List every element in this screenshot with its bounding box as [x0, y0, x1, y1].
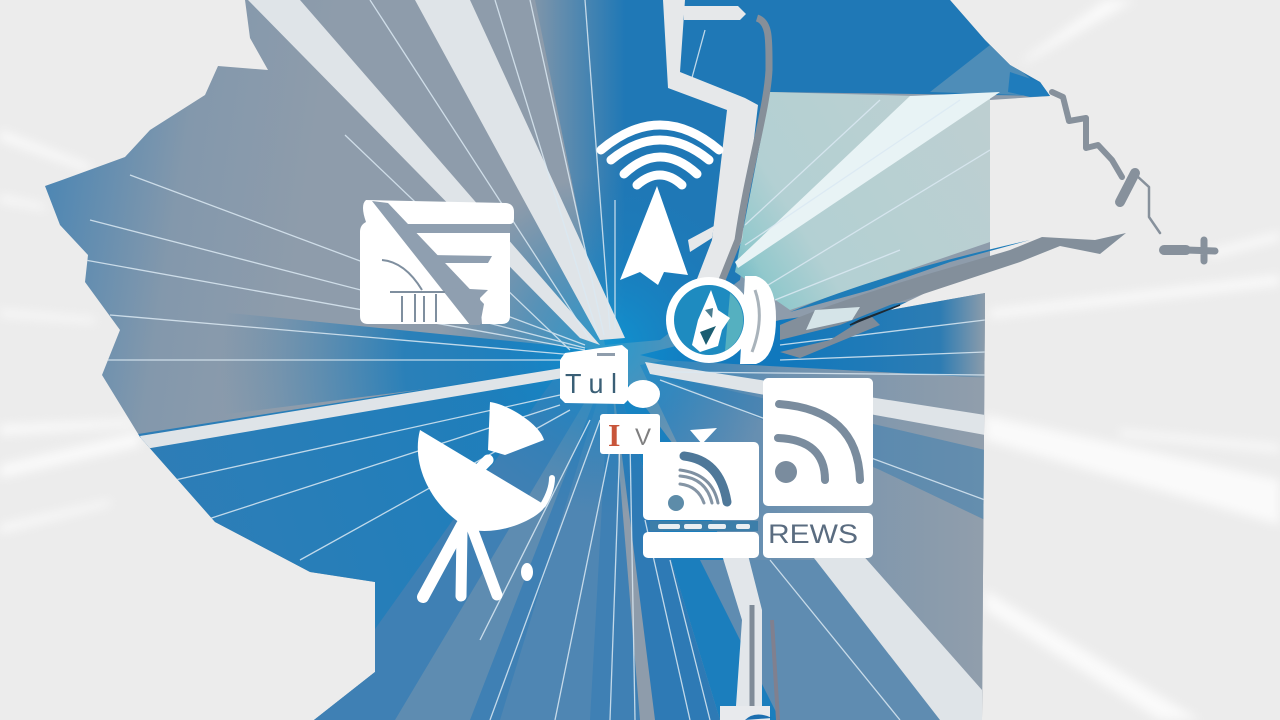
white dot — [626, 380, 660, 408]
wifi arcs — [601, 125, 719, 185]
coast blue tip — [1008, 72, 1050, 97]
map sector: top blue — [535, 0, 1060, 345]
small arrow tip — [690, 428, 717, 444]
map sector: right gray and blue — [640, 300, 990, 720]
center blue glow — [454, 194, 758, 500]
coastline lower gray band — [780, 233, 1126, 358]
map sector: bottom gray blue — [310, 360, 640, 720]
icon: TV label: I — [608, 417, 620, 453]
icon: satellite dish — [418, 402, 552, 597]
map silhouette with radial rays — [45, 0, 1050, 720]
coastline right islands — [1052, 92, 1215, 261]
icon: RSS news card: REWS — [768, 519, 858, 549]
map base: gray — [45, 0, 1050, 720]
icon: RSS news card — [763, 378, 873, 558]
icon: clapperboard news panel — [360, 200, 514, 325]
teal pale ray — [735, 92, 1000, 268]
map sector: left blue glow — [241, 315, 592, 412]
map sector: lower left blue — [138, 380, 553, 720]
thick white rays — [140, 0, 985, 720]
thin white rays — [85, 0, 990, 720]
map sector: teal — [735, 92, 990, 310]
icon: wifi tower — [601, 125, 719, 285]
road: lower — [720, 555, 778, 720]
tower — [620, 186, 688, 285]
road: upper white and gray — [663, 0, 769, 292]
icon: TV label: V — [635, 424, 651, 451]
icon: TV card small — [560, 345, 628, 404]
icon: TV card small: T u l — [565, 368, 617, 399]
icon: globe badge — [666, 276, 776, 364]
icon: TV label — [600, 414, 660, 454]
icon: wifi card with keyboard — [643, 442, 759, 558]
